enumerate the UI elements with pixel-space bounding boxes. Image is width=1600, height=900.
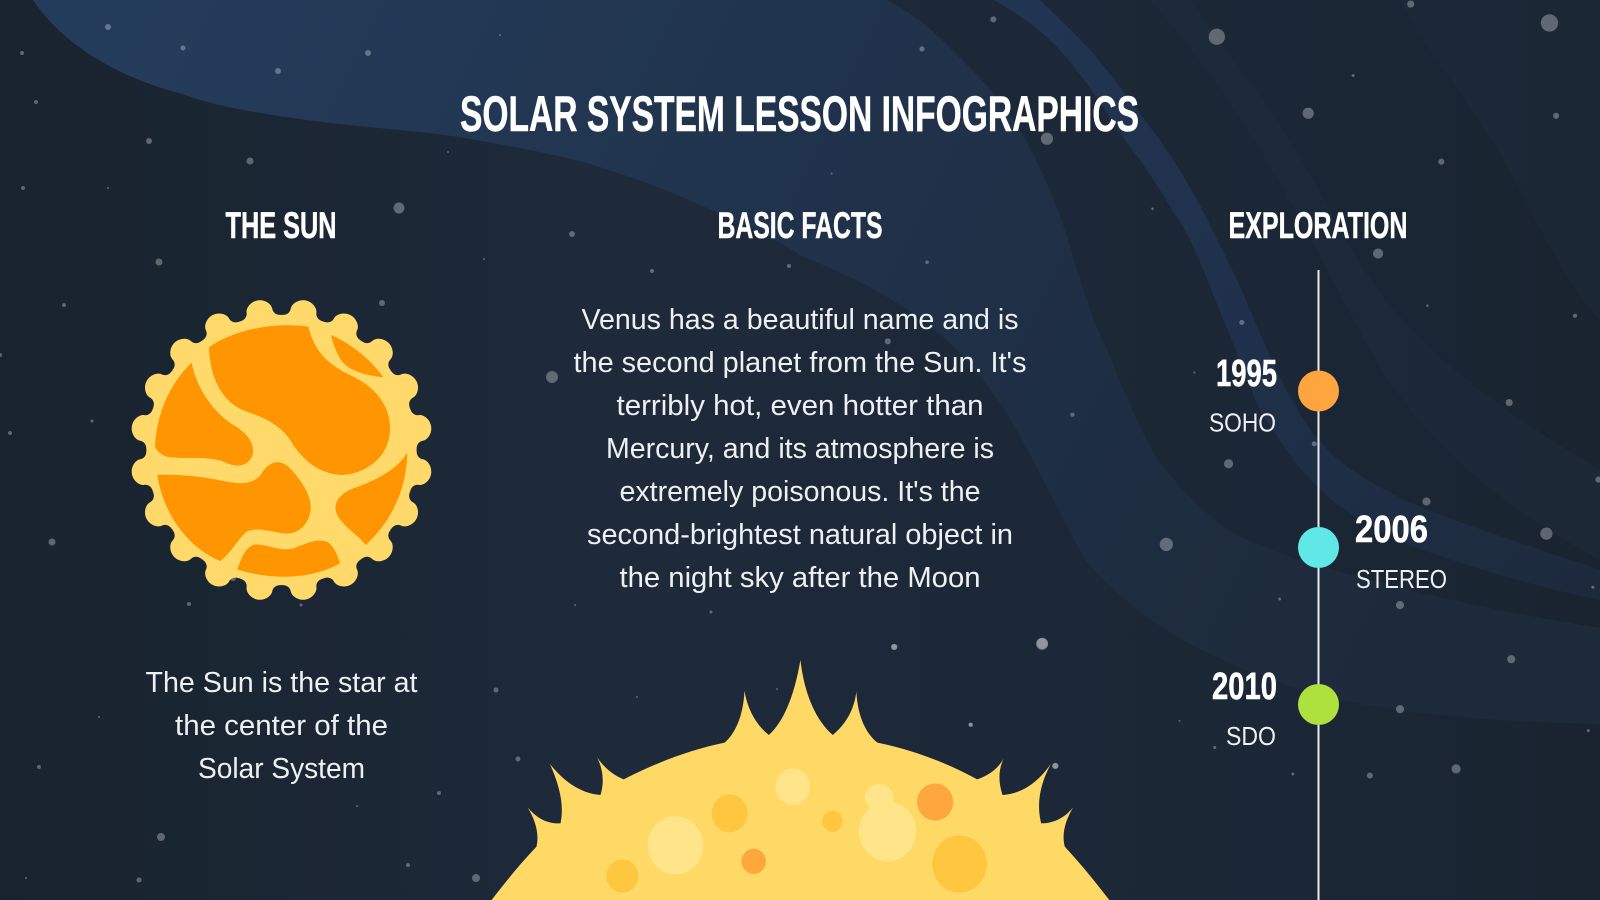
exploration timeline — [1209, 270, 1447, 900]
basic facts text block: second-brightest natural object in — [587, 519, 1013, 551]
heading: exploration: EXPLORATION — [1228, 205, 1408, 246]
title: SOLAR SYSTEM LESSON INFOGRAPHICS — [460, 86, 1139, 142]
milestone: 2006 STEREO: 2006 — [1355, 509, 1428, 551]
milestone: 1995 SOHO: SOHO — [1209, 408, 1276, 438]
sun description: the center of the — [175, 710, 388, 742]
basic facts text block: Venus has a beautiful name and is — [582, 304, 1018, 336]
icon: scalloped sun illustration — [129, 297, 434, 603]
sun description: The Sun is the star at — [146, 667, 418, 699]
sun description — [146, 667, 418, 785]
milestone: 2010 SDO — [1212, 666, 1339, 751]
basic facts text block: the second planet from the Sun. It's — [574, 347, 1026, 379]
basic facts text block: the night sky after the Moon — [620, 562, 980, 594]
basic facts text block — [574, 304, 1026, 594]
milestone: 2010 SDO: 2010 — [1212, 666, 1277, 708]
icon: large rising sun with flares and spots — [491, 660, 1110, 900]
milestone: 2006 STEREO: STEREO — [1356, 564, 1447, 594]
sun description: Solar System — [198, 753, 365, 785]
heading: the sun: THE SUN — [226, 205, 336, 246]
milestone: 2006 STEREO — [1298, 509, 1447, 594]
milestone: 1995 SOHO — [1209, 353, 1339, 438]
basic facts text block: extremely poisonous. It's the — [620, 476, 980, 508]
basic facts text block: terribly hot, even hotter than — [616, 390, 984, 422]
timeline axis — [1318, 270, 1320, 900]
basic facts text block: Mercury, and its atmosphere is — [606, 433, 994, 465]
milestone: 2010 SDO: SDO — [1226, 721, 1276, 751]
milestone: 1995 SOHO: 1995 — [1216, 353, 1277, 395]
heading: basic facts: BASIC FACTS — [718, 205, 882, 246]
